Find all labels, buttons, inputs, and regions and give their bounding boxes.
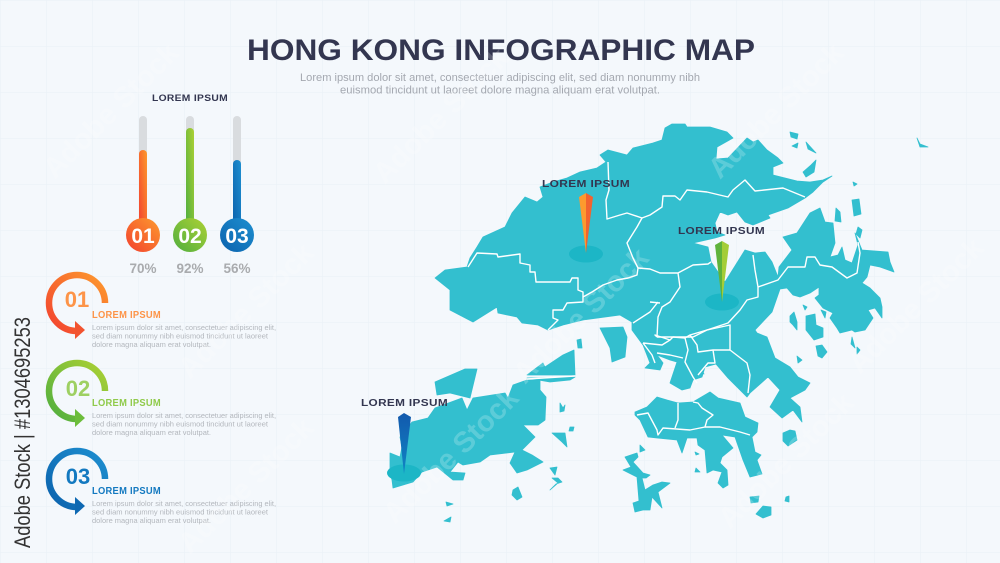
panel: list item 03: sed diam nonummy nibh euismod tincidunt ut laoreet [92, 508, 268, 516]
map: small islands [444, 132, 928, 522]
map: Hong Kong [390, 124, 928, 522]
panel: list item 03: dolore magna aliquam erat volutpat. [92, 516, 211, 525]
icon: circular arrow 02 [49, 363, 105, 427]
panel: list item 01: Lorem ipsum dolor sit amet, consectetuer adipiscing elit, [92, 323, 276, 332]
pin label: orange: LOREM IPSUM [542, 179, 630, 190]
bar 03 at 56%: 56% [223, 261, 251, 276]
subtitle text: Lorem ipsum dolor sit amet, consectetuer adipiscing elit, sed diam nonummy nibh [300, 72, 700, 84]
map region: New Territories and Kowloon [435, 124, 894, 422]
pin base [387, 464, 421, 482]
panel: list item 01 [49, 275, 276, 349]
map region: Chek Lap Kok [435, 369, 477, 398]
icon: circular arrow 03 [49, 451, 105, 515]
panel: list item 02: 02 [66, 376, 90, 401]
icon: circular arrow 01 [49, 275, 105, 339]
title: HONG KONG INFOGRAPHIC MAP [247, 34, 755, 67]
pin label: blue: LOREM IPSUM [361, 398, 448, 409]
subtitle text: euismod tincidunt ut laoreet dolore magna aliquam erat volutpat. [340, 84, 660, 96]
panel: list item 01: sed diam nonummy nibh euismod tincidunt ut laoreet [92, 332, 268, 340]
map pin: blue [387, 413, 421, 482]
bar 03 at 56% [220, 116, 254, 276]
panel: list item 02: dolore magna aliquam erat volutpat. [92, 428, 211, 437]
text: Adobe Stock [37, 36, 186, 185]
chart heading: LOREM IPSUM [152, 93, 228, 104]
text: Adobe Stock [702, 36, 851, 185]
map region: Tsing Yi [600, 327, 627, 362]
map pin: green [705, 241, 739, 310]
stock credit, vertical text: Adobe Stock | #1304695253 [10, 317, 35, 548]
map region: Lamma Island [623, 453, 670, 512]
map: district borders [468, 162, 860, 435]
panel: list item 02: sed diam nonummy nibh euismod tincidunt ut laoreet [92, 420, 268, 428]
bar 02 at 92%: 02 [178, 225, 202, 248]
bar 02 at 92%: 92% [176, 261, 204, 276]
bar 02 at 92% [173, 116, 207, 276]
panel: list item 01: 01 [65, 287, 89, 312]
panel: list item 01: LOREM IPSUM [92, 310, 161, 321]
panel: list item 03: Lorem ipsum dolor sit amet, consectetuer adipiscing elit, [92, 499, 276, 508]
text: Adobe Stock [507, 241, 656, 390]
text: Adobe Stock [172, 236, 321, 385]
pin base [705, 294, 739, 310]
text: Adobe Stock [377, 381, 526, 530]
panel: list item 02: Lorem ipsum dolor sit amet, consectetuer adipiscing elit, [92, 411, 276, 420]
subtitle text [300, 72, 700, 96]
text: Adobe Stock [172, 411, 321, 560]
bar 01 at 70% [126, 116, 160, 276]
panel: list item 02: LOREM IPSUM [92, 398, 161, 409]
panel: list item 03: LOREM IPSUM [92, 486, 161, 497]
text: Adobe Stock [712, 386, 861, 535]
map region: Ma Wan and Tsing Lung Tau [527, 350, 575, 382]
panel: list item 02 [49, 363, 276, 437]
map pin: orange [569, 193, 603, 262]
panel: thermometer bar chart [126, 93, 254, 276]
panel: list item 03 [49, 451, 276, 525]
map region: Lantau Island [390, 380, 546, 488]
bar 01 at 70%: 01 [131, 225, 155, 248]
pin base [569, 246, 603, 262]
pin label: green: LOREM IPSUM [678, 226, 765, 237]
panel: list item 03: 03 [66, 464, 90, 489]
text: Adobe Stock [842, 231, 991, 380]
text: Adobe Stock [367, 41, 516, 190]
bar 03 at 56%: 03 [225, 225, 249, 248]
panel: list item 01: dolore magna aliquam erat volutpat. [92, 340, 211, 349]
map region: Hong Kong Island [635, 392, 762, 488]
bar 01 at 70%: 70% [129, 261, 157, 276]
